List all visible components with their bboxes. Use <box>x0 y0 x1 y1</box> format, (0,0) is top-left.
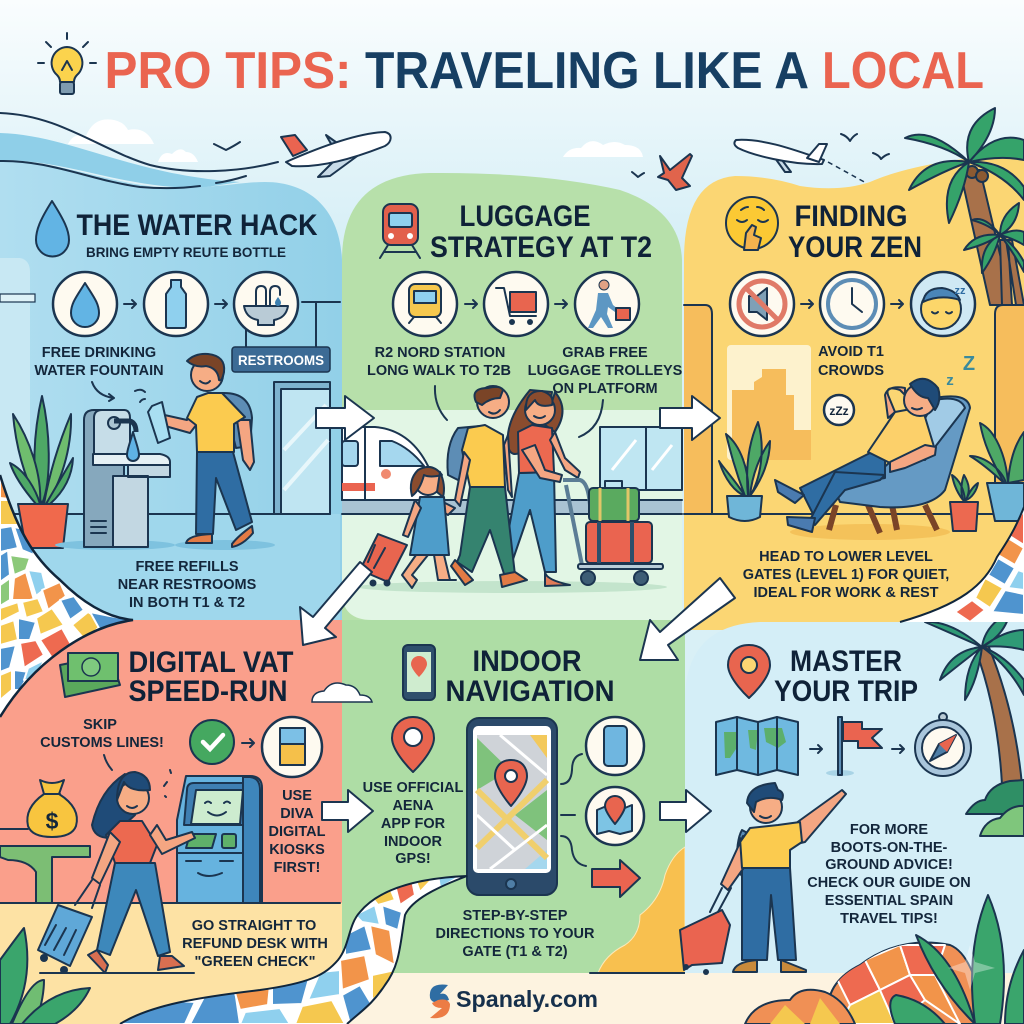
icon row <box>393 272 639 336</box>
palm tree lower <box>925 612 1024 836</box>
mosaic left <box>0 470 140 720</box>
text: lower level: GATES (LEVEL 1) FOR QUIET, <box>743 567 949 583</box>
large phone map <box>467 718 557 895</box>
label: r2 station: LONG WALK TO T2B <box>367 363 511 379</box>
footer band <box>342 973 1024 1024</box>
table and money bag: $ <box>46 808 59 834</box>
text: go straight: REFUND DESK WITH <box>182 936 328 952</box>
table and money bag <box>0 780 90 903</box>
heading: NAVIGATION <box>446 675 614 708</box>
heading: YOUR ZEN <box>788 231 922 264</box>
icon: map pin <box>392 717 434 772</box>
mosaic right <box>900 500 1024 625</box>
text: use diva: USE <box>282 788 312 804</box>
heading: DIGITAL VAT <box>128 646 294 679</box>
icon: phone with pin <box>403 645 435 700</box>
text: lower level: HEAD TO LOWER LEVEL <box>759 549 933 565</box>
arrow: luggage to zen <box>660 396 720 440</box>
palm trees top right <box>905 108 1024 305</box>
text: boots on the ground: GROUND ADVICE! <box>825 857 953 873</box>
title <box>38 33 984 100</box>
train window <box>600 427 682 490</box>
label: skip customs: CUSTOMS LINES! <box>40 735 164 751</box>
icon: shush face <box>726 197 778 250</box>
family walking <box>357 386 667 593</box>
label: aena: AENA <box>392 798 434 814</box>
person with bottle <box>148 354 275 550</box>
text: go straight: GO STRAIGHT TO <box>192 918 316 934</box>
pointer lines <box>435 386 603 437</box>
label: avoid crowds: AVOID T1 <box>818 344 884 360</box>
label: aena: GPS! <box>395 851 431 867</box>
title: PRO TIPS: <box>104 42 352 100</box>
yellow path <box>598 847 685 973</box>
arrow: vat to navigation <box>322 790 373 832</box>
icon row <box>53 272 298 336</box>
text: step by step: STEP-BY-STEP <box>463 908 568 924</box>
label: fountain: FREE DRINKING <box>42 345 156 361</box>
label: aena: APP FOR <box>381 816 446 832</box>
text: step by step: DIRECTIONS TO YOUR <box>436 926 595 942</box>
traveler pointing <box>680 783 846 975</box>
icon: red bird <box>658 154 692 190</box>
icon: pin <box>728 645 770 698</box>
label: trolleys: ON PLATFORM <box>552 381 658 397</box>
person relaxing in chair: Z <box>963 353 975 375</box>
text: free refills: NEAR RESTROOMS <box>118 577 257 593</box>
title: LOCAL <box>822 42 984 100</box>
text: boots on the ground: TRAVEL TIPS! <box>840 911 938 927</box>
mosaic and leaves bottom right <box>745 895 1024 1024</box>
icon: water drop <box>36 201 69 256</box>
text: boots on the ground: FOR MORE <box>850 822 928 838</box>
footer logo: Spanaly.com <box>456 986 598 1012</box>
plant left <box>719 422 770 521</box>
heading: THE WATER HACK <box>76 209 318 242</box>
kiosk <box>177 776 262 903</box>
text: step by step: GATE (T1 & T2) <box>462 944 568 960</box>
label: fountain: WATER FOUNTAIN <box>34 363 164 379</box>
text: use diva: FIRST! <box>274 860 320 876</box>
text: boots on the ground: BOOTS-ON-THE- <box>831 840 948 856</box>
heading: FINDING <box>794 200 908 233</box>
text: boots on the ground: ESSENTIAL SPAIN <box>825 893 953 909</box>
panel: digital vat <box>0 620 385 1024</box>
icon: airplane left <box>281 132 391 177</box>
label: aena: INDOOR <box>384 834 443 850</box>
sign: restrooms: RESTROOMS <box>238 352 324 368</box>
label: trolleys: LUGGAGE TROLLEYS <box>528 363 683 379</box>
cloud <box>312 683 372 702</box>
train <box>342 427 428 500</box>
icon: airplane right <box>734 140 868 184</box>
heading: MASTER <box>790 645 902 678</box>
plant <box>10 396 73 548</box>
text: use diva: DIGITAL <box>269 824 326 840</box>
panel: finding your zen <box>684 153 1024 630</box>
heading: STRATEGY AT T2 <box>430 231 652 264</box>
speech bubble zzz <box>824 395 854 425</box>
text: free refills: FREE REFILLS <box>135 559 239 575</box>
map flag compass row <box>716 713 971 776</box>
leaves bottom left <box>0 928 90 1024</box>
text: lower level: IDEAL FOR WORK & REST <box>753 585 939 601</box>
traveler with blue suitcase <box>38 755 195 974</box>
panel: the water hack <box>0 113 342 622</box>
label: avoid crowds: CROWDS <box>818 363 884 379</box>
text: use diva: DIVA <box>280 806 314 822</box>
text: free refills: IN BOTH T1 & T2 <box>129 595 245 611</box>
subheading: BRING EMPTY REUTE BOTTLE <box>86 244 286 260</box>
footer logo <box>430 985 598 1018</box>
panel: indoor navigation <box>342 620 685 973</box>
pointer to fountain <box>92 382 114 401</box>
ground line <box>590 972 835 974</box>
sky decorations <box>68 119 889 190</box>
sign: restrooms <box>232 302 340 372</box>
drinking fountain <box>55 390 175 550</box>
glass door <box>274 382 330 514</box>
person relaxing in chair <box>775 353 975 540</box>
panel: luggage strategy <box>342 173 683 625</box>
arrow: water to luggage <box>316 396 374 440</box>
arrow: luggage to vat <box>300 562 372 645</box>
text: use diva: KIOSKS <box>269 842 325 858</box>
small plant and pots right <box>950 423 1024 531</box>
label: aena: USE OFFICIAL <box>363 780 463 796</box>
window with city <box>727 345 811 460</box>
person relaxing in chair: z <box>946 372 954 389</box>
mosaic path <box>120 872 467 1024</box>
icon: train <box>380 204 420 258</box>
icon: light bulb <box>38 33 96 94</box>
icon row <box>730 272 975 336</box>
label: r2 station: R2 NORD STATION <box>375 345 505 361</box>
arrow: zen to navigation <box>640 578 735 660</box>
text: boots on the ground: CHECK OUR GUIDE ON <box>807 875 971 891</box>
label: skip customs: SKIP <box>83 717 117 733</box>
speech bubble zzz: zZz <box>829 404 849 418</box>
heading: LUGGAGE <box>460 200 590 233</box>
luggage trolley <box>563 480 663 585</box>
text: go straight: "GREEN CHECK" <box>195 954 315 970</box>
label: trolleys: GRAB FREE <box>562 345 648 361</box>
connector icons <box>561 717 644 897</box>
heading: SPEED-RUN <box>128 675 288 708</box>
heading: INDOOR <box>472 645 582 678</box>
icon row: zz <box>954 285 966 297</box>
panel: master your trip <box>680 612 1024 1024</box>
icon: cash <box>60 653 120 697</box>
check and kiosk icons <box>190 717 322 777</box>
title: TRAVELING LIKE A <box>365 42 809 100</box>
heading: YOUR TRIP <box>774 675 918 708</box>
arrow: navigation to trip <box>660 790 711 832</box>
